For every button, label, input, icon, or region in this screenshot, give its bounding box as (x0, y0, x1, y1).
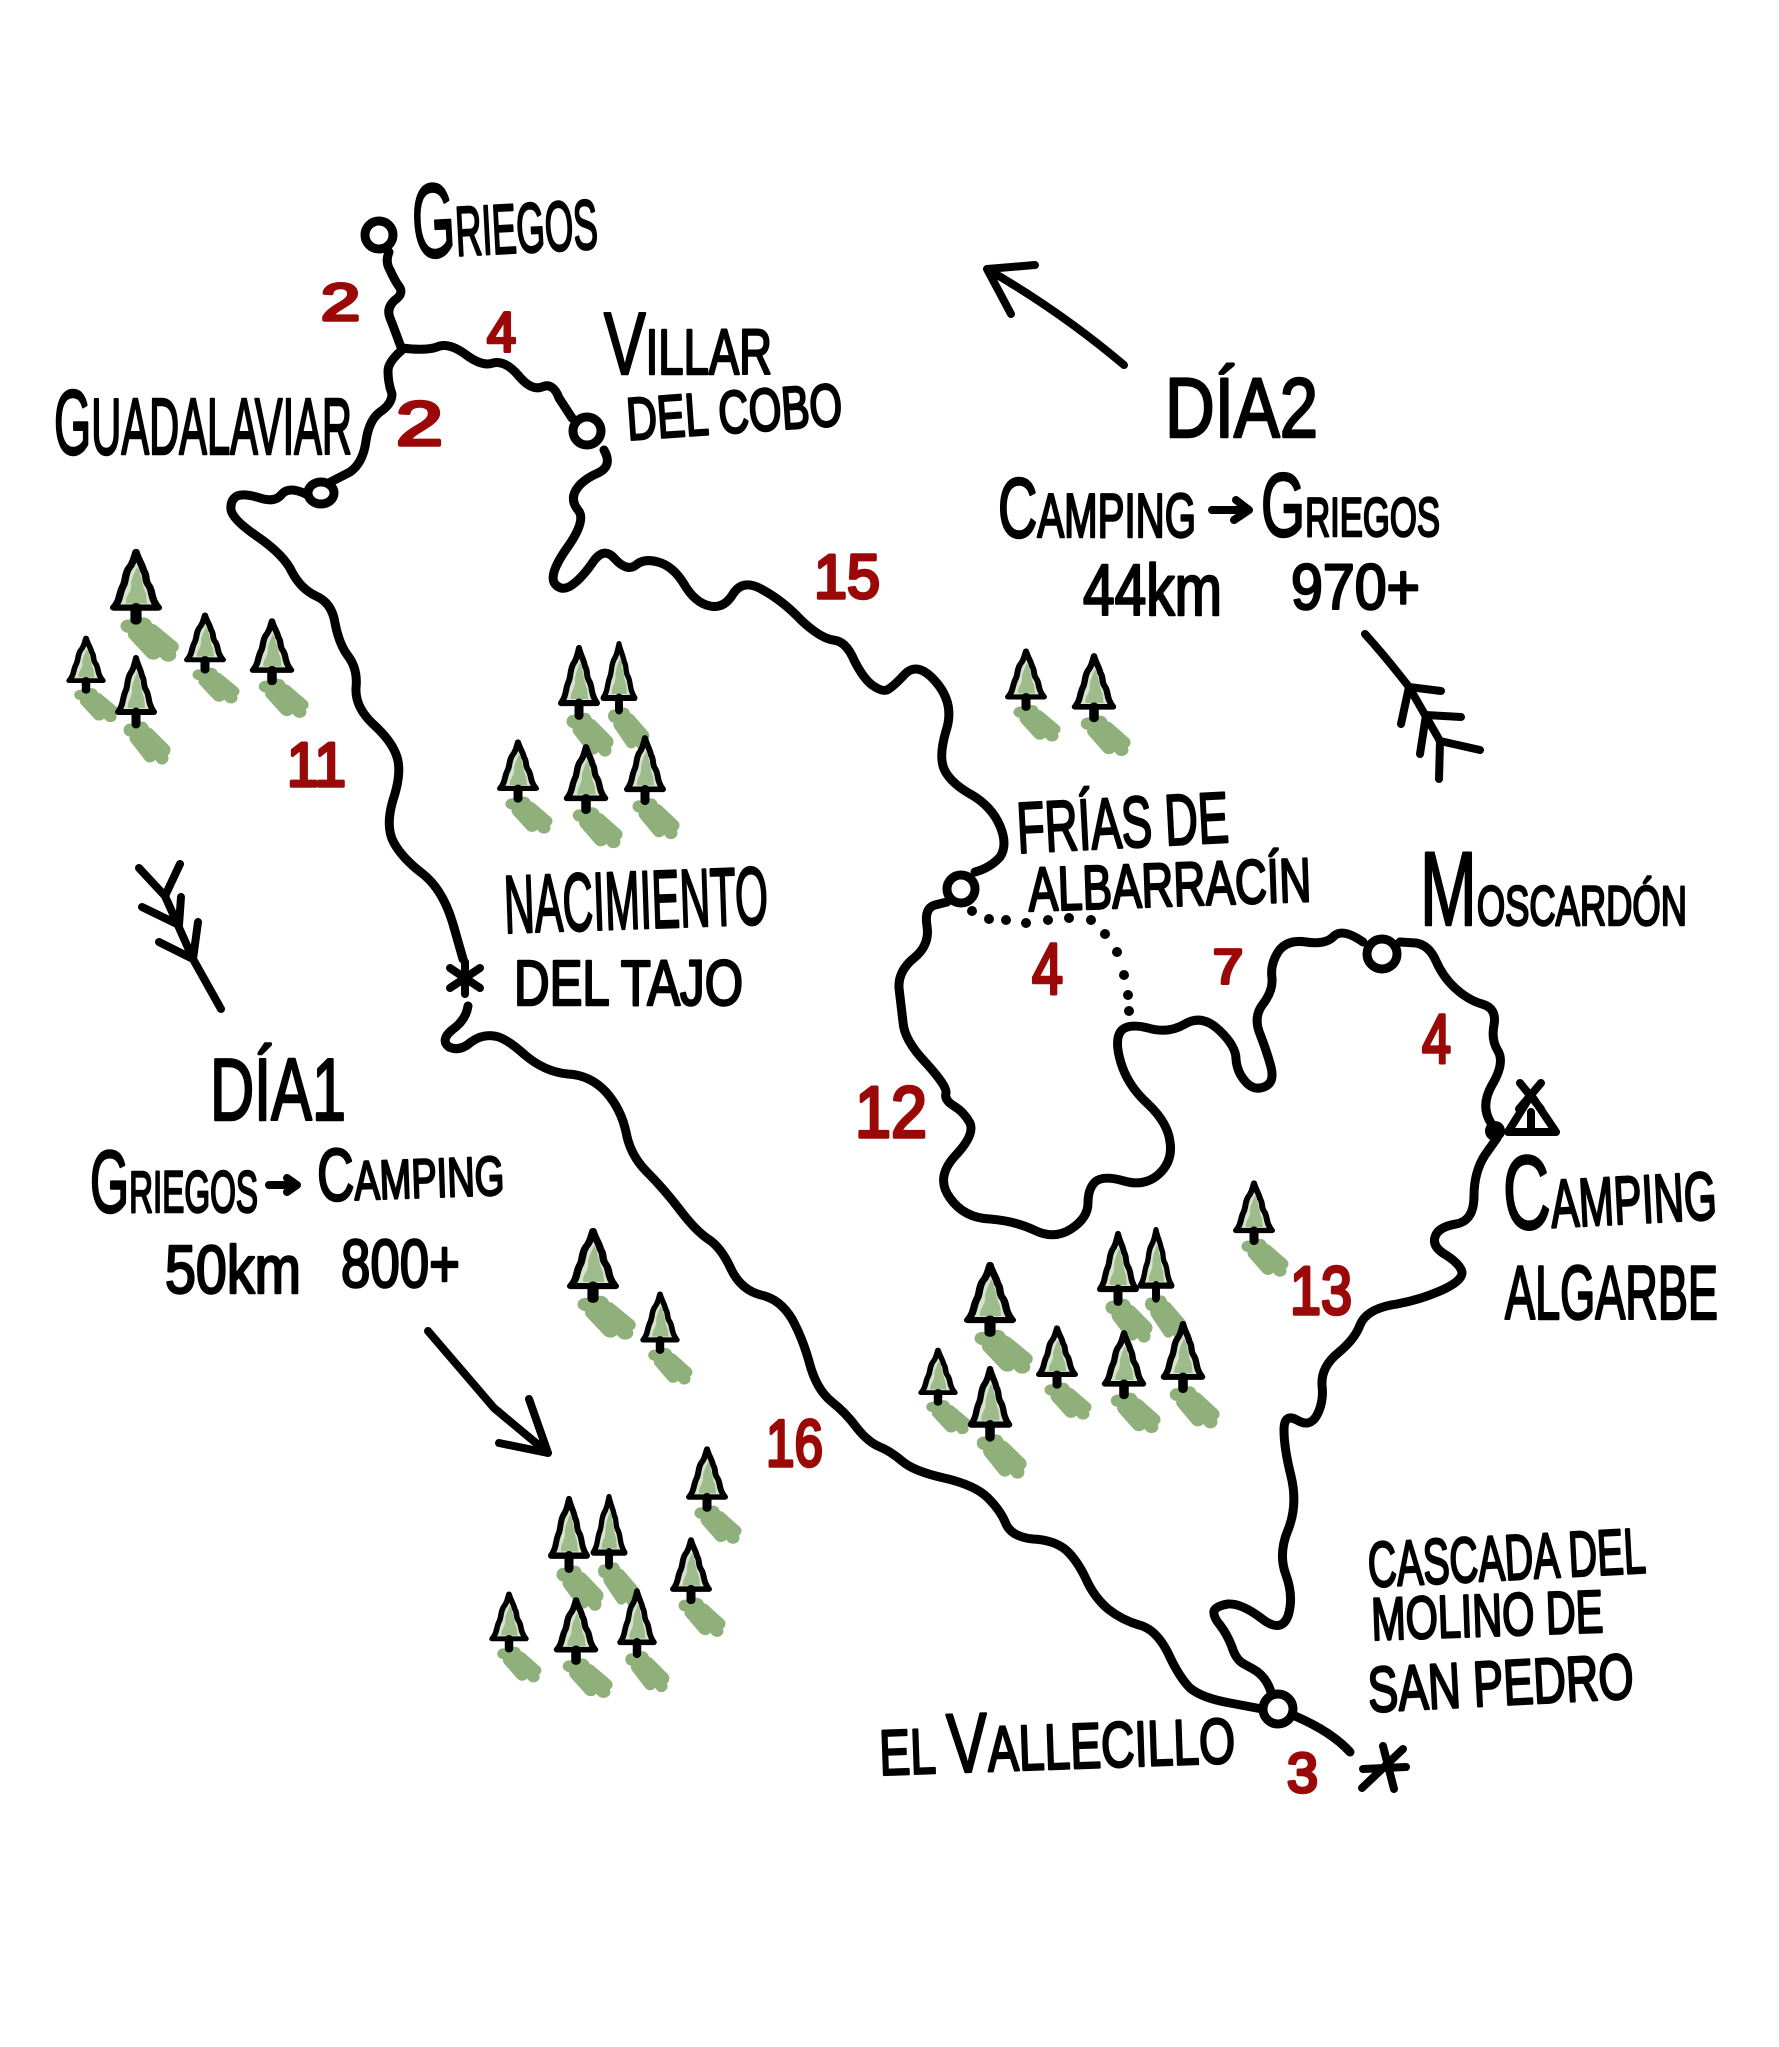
waypoint: Griegos (365, 221, 393, 249)
route: Nacimiento del Tajo to El Vallecillo (445, 1006, 1262, 1709)
arrow: day 2 direction (987, 265, 1124, 365)
stat: 44 km: 44km (1083, 551, 1222, 631)
arrow: feather day 1 (139, 864, 221, 1009)
route: El Vallecillo to Cascada (1295, 1716, 1350, 1752)
label: Griegos: GRIEGOS (409, 154, 600, 281)
label: San Pedro: SAN PEDRO (1366, 1640, 1635, 1726)
waypoint: Moscardón (1367, 939, 1397, 969)
distance numbers: 7 (1213, 941, 1243, 994)
icon: tent Camping Algarbe (1485, 1083, 1556, 1141)
distance numbers (287, 274, 1451, 1804)
distance numbers: 16 (766, 1406, 823, 1480)
arrow: Griegos to Camping (269, 1178, 297, 1192)
waypoint: Villar del Cobo (573, 417, 601, 445)
route: Guadalaviar to Nacimiento del Tajo (231, 490, 463, 959)
waypoint: Frías de Albarracín (947, 875, 975, 903)
label: Griegos day 1: GRIEGOS (90, 1132, 258, 1231)
label: Camping day 1: CAMPING (316, 1128, 505, 1217)
route: junction to Villar del Cobo (402, 346, 572, 418)
label: Griegos day 2: GRIEGOS (1261, 456, 1440, 556)
arrow: day 1 direction (428, 1331, 548, 1453)
label: Villar: VILLAR (604, 294, 772, 393)
route: El Vallecillo to Camping Algarbe (1214, 1138, 1497, 1692)
distance numbers: 15 (814, 543, 880, 612)
stat: 970+: 970+ (1291, 551, 1420, 623)
distance numbers: 12 (855, 1073, 927, 1153)
waypoint: El Vallecillo (1263, 1694, 1293, 1724)
distance numbers: 2 (396, 390, 443, 459)
heading: Día 2: DÍA2 (1165, 361, 1318, 455)
route: Moscardón to Frías de Albarracín (899, 902, 1363, 1235)
trees: centre cluster (500, 644, 673, 842)
label: El Vallecillo: EL VALLECILLO (877, 1687, 1236, 1793)
waypoint: Guadalaviar (308, 482, 334, 504)
dotted shortcut (967, 906, 1134, 1016)
distance numbers: 13 (1290, 1253, 1352, 1329)
arrow: Camping to Griegos (1212, 500, 1249, 520)
label: Nacimiento: NACIMIENTO (502, 851, 769, 951)
label: Guadalaviar: GUADALAVIAR (54, 372, 352, 474)
distance numbers: 4 (487, 300, 516, 363)
label: Camping day 2: CAMPING (998, 461, 1196, 555)
arrow: feather day 2 (1365, 634, 1480, 779)
label: del Tajo: DEL TAJO (514, 947, 743, 1019)
distance numbers: 2 (321, 274, 360, 332)
label: Frías de: FRÍAS DE (1015, 778, 1231, 869)
distance numbers: 4 (1422, 1000, 1451, 1078)
route: Frías de Albarracín to Villar del Cobo (553, 450, 1004, 872)
distance numbers: 3 (1287, 1741, 1318, 1804)
stat: 800+: 800+ (341, 1226, 460, 1302)
route: Camping Algarbe to Moscardón (1400, 942, 1500, 1123)
icon: star Nacimiento del Tajo (450, 962, 480, 994)
heading: Día 1: DÍA1 (210, 1040, 346, 1139)
label: Albarracín: ALBARRACÍN (1027, 846, 1312, 925)
route: Griegos to Guadalaviar (321, 252, 402, 487)
trees: north-west cluster (69, 552, 302, 758)
distance numbers: 11 (287, 731, 346, 800)
trees: south-west cluster (492, 1231, 735, 1692)
icon: star Cascada (1362, 1746, 1406, 1789)
label: Molino de: MOLINO DE (1370, 1578, 1604, 1653)
trees: south-east cluster (921, 1183, 1282, 1472)
trees: north-east pair (1008, 651, 1124, 750)
stat: 50 km: 50km (165, 1232, 301, 1308)
distance numbers: 4 (1032, 930, 1063, 1010)
label: del Cobo: DEL COBO (624, 371, 844, 453)
